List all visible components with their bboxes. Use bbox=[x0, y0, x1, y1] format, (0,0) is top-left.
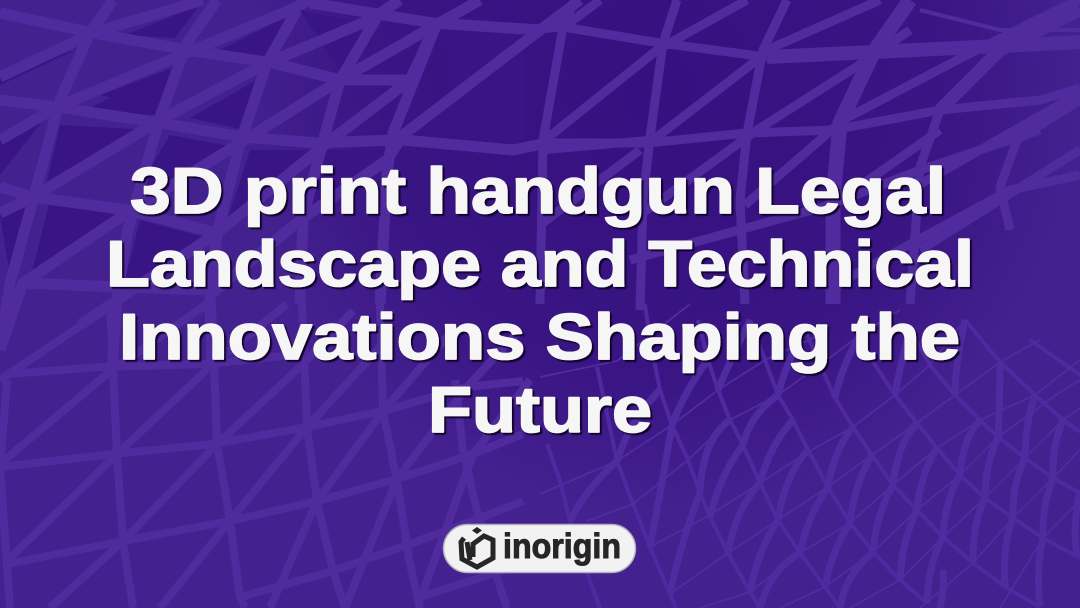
wordmark: inorigin bbox=[503, 527, 621, 566]
lower left struts bbox=[0, 304, 530, 608]
dark shaded roof cells bbox=[0, 5, 525, 300]
title: 3D print handgun Legal bbox=[130, 154, 946, 227]
title: Innovations Shaping the bbox=[119, 300, 960, 373]
lower right curved struts bbox=[547, 304, 1080, 608]
title bbox=[106, 154, 974, 446]
title: Landscape and Technical bbox=[106, 227, 974, 300]
logo pill background bbox=[444, 524, 636, 572]
title: Future bbox=[428, 373, 652, 446]
lower right leaf struts bbox=[570, 320, 1080, 608]
upper right struts bbox=[523, 0, 1080, 310]
icon: hexagonal cube bbox=[461, 527, 493, 567]
logo badge bbox=[444, 524, 636, 572]
